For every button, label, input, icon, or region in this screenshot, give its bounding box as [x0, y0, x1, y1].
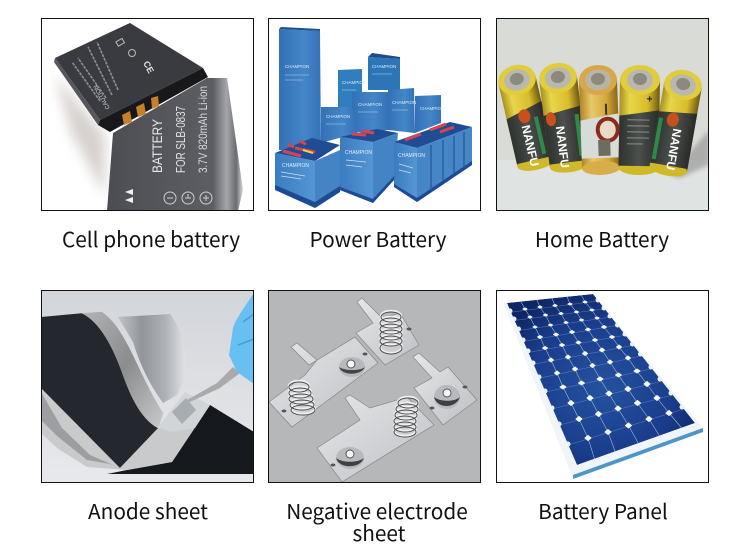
- front right cell block: CHAMPION: [398, 153, 425, 159]
- AA battery 2: NANFU: [553, 125, 572, 169]
- back row cells: CHAMPION: [358, 102, 382, 107]
- panel border 1: [42, 18, 254, 210]
- panel: cell phone battery photo: [54, 23, 243, 210]
- front battery: [54, 23, 208, 132]
- back row cells: CHAMPION: [372, 64, 396, 69]
- AA battery 1: NANFU: [519, 124, 542, 168]
- back row cells: CHAMPION: [342, 80, 366, 85]
- front battery: CE: [141, 59, 156, 75]
- back battery: BATTERY: [149, 118, 165, 173]
- back row cells: CHAMPION: [392, 100, 416, 105]
- front middle cell block: CHAMPION: [345, 150, 372, 156]
- label: Power Battery: Power Battery: [310, 223, 447, 253]
- solar cells: [505, 293, 695, 470]
- AA battery 3 gold: [578, 64, 621, 176]
- front battery: CAUTION: [93, 84, 112, 110]
- back battery: FOR SLB-0837: [174, 106, 188, 173]
- front left cell block: CHAMPION: [282, 163, 309, 169]
- panel border 4: [42, 290, 254, 482]
- foil band: [82, 312, 163, 428]
- front middle cell block: [340, 129, 398, 203]
- foil curl: [118, 314, 186, 403]
- front right cell block: [394, 122, 472, 202]
- AA battery 2: [539, 62, 582, 173]
- springs: [289, 311, 418, 436]
- label: Anode sheet: Anode sheet: [88, 495, 208, 525]
- panel: anode sheet photo: [41, 290, 254, 483]
- blue glove: [229, 293, 254, 384]
- label: Negative electrode sheet: sheet: [352, 517, 406, 547]
- back row cells: [279, 27, 444, 150]
- AA battery 5: NANFU: [663, 127, 684, 171]
- label: Negative electrode sheet: Negative electrode: [286, 495, 468, 525]
- scalloped cell edge notches: [508, 298, 684, 446]
- panel: battery panel photo: [496, 290, 709, 483]
- white cell junction diamonds: [523, 301, 672, 440]
- panel border 3: [496, 18, 708, 210]
- panel: home battery photo: [495, 18, 709, 211]
- back row cells: CHAMPION: [420, 106, 444, 111]
- AA battery 4: +: [647, 94, 653, 105]
- AA battery 4: [618, 65, 660, 175]
- panel: negative electrode sheet photo: [268, 290, 481, 483]
- back row cells: CHAMPION: [326, 114, 350, 119]
- black coated sheet lower right: [107, 405, 254, 474]
- panel: power battery photo: [275, 27, 472, 208]
- scalpel: [187, 367, 240, 402]
- panel border 6: [496, 290, 708, 482]
- metal plates: [269, 298, 477, 482]
- peeled foil patch: [158, 392, 210, 432]
- back row cells: CHAMPION: [285, 64, 309, 69]
- slots: [282, 328, 468, 466]
- front left cell block: [275, 138, 340, 208]
- dimples: [336, 357, 460, 469]
- foil lower band: [41, 388, 210, 470]
- spring shadows: [289, 312, 418, 437]
- back battery: [107, 78, 243, 211]
- panel border 2: [268, 18, 480, 210]
- solar frame: [503, 294, 703, 478]
- label: Home Battery: Home Battery: [535, 223, 669, 253]
- label: Cell phone battery: Cell phone battery: [62, 223, 240, 253]
- black coated sheet: [41, 313, 158, 468]
- panel border 5: [268, 290, 480, 482]
- AA battery 1: [498, 64, 550, 171]
- label: Battery Panel: Battery Panel: [538, 495, 668, 525]
- AA battery 5: [650, 70, 702, 176]
- back battery: 3.7V 820mAh Li-ion: [196, 86, 210, 173]
